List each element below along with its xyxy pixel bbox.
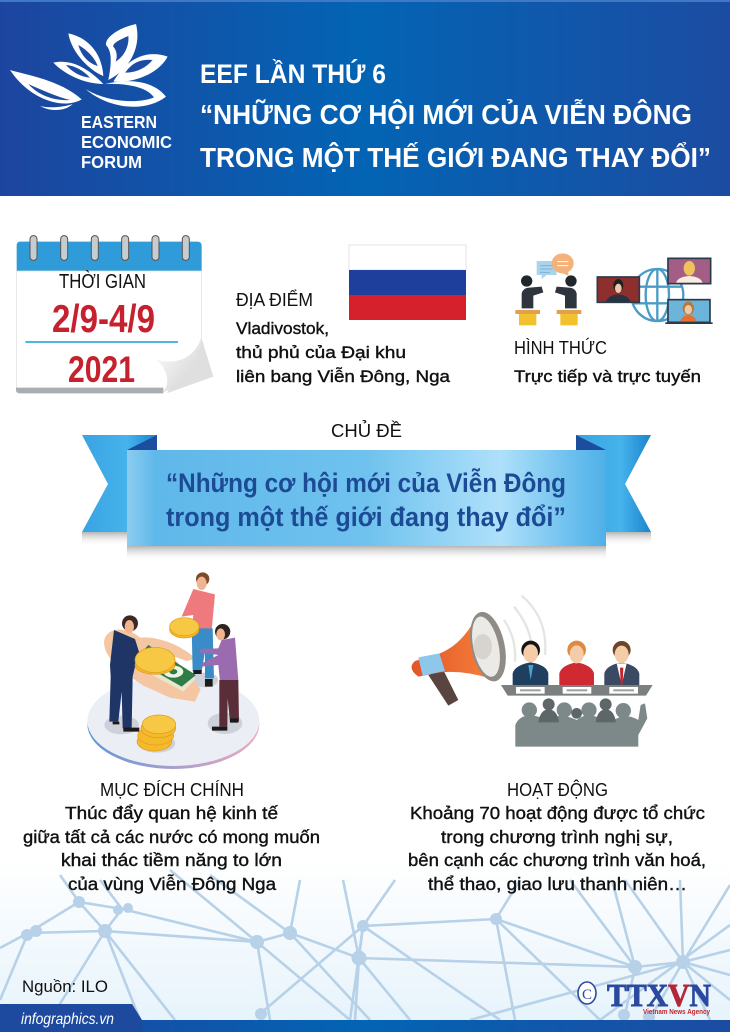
- location text: ĐỊA ĐIỂM: [236, 289, 313, 310]
- main purpose text: Thúc đẩy quan hệ kinh tế: [65, 803, 278, 823]
- open hand: [104, 629, 201, 702]
- theme heading: CHỦ ĐỀ: [331, 420, 402, 441]
- illustration: megaphone and press conference: [412, 596, 653, 747]
- disc: [87, 673, 259, 769]
- sound waves: [504, 596, 545, 662]
- title: [200, 58, 711, 173]
- activities text: trong chương trình nghị sự,: [441, 827, 673, 847]
- activities text: Khoảng 70 hoạt động được tổ chức: [410, 803, 705, 823]
- panelists: [513, 641, 639, 685]
- main purpose text: khai thác tiềm năng to lớn: [61, 850, 282, 870]
- megaphone: [412, 609, 512, 706]
- ribbon: theme: [82, 435, 651, 561]
- website: infographics.vn: [21, 1011, 114, 1028]
- location text: [236, 289, 451, 386]
- logo: Eastern Economic Forum: EASTERN: [81, 112, 157, 132]
- man in purple sweater: [200, 624, 239, 731]
- location text: liên bang Viễn Đông, Nga: [236, 367, 451, 386]
- title: EEF LẦN THỨ 6: [200, 58, 386, 89]
- header banner: [0, 0, 730, 196]
- debaters at podiums: [515, 275, 581, 325]
- logo: Eastern Economic Forum: [10, 24, 172, 172]
- man in pink sweater: [182, 572, 215, 687]
- ribbon text: [166, 468, 566, 532]
- ribbon text: “Những cơ hội mới của Viễn Đông: [166, 468, 566, 498]
- main purpose text: [23, 780, 320, 894]
- format text: HÌNH THỨC: [514, 337, 607, 358]
- banknotes: [133, 645, 196, 692]
- calendar: time: 2021: [68, 349, 135, 390]
- TTXVN logo: C: [582, 987, 592, 1003]
- source: Nguồn: ILO: [22, 977, 108, 996]
- location text: thủ phủ của Đại khu: [236, 343, 406, 362]
- footer band: [0, 1004, 730, 1032]
- main purpose text: giữa tất cả các nước có mong muốn: [23, 827, 320, 847]
- globe: [631, 269, 683, 321]
- illustration: investors, coins and money: [87, 572, 259, 769]
- format text: [514, 337, 701, 386]
- main purpose text: MỤC ĐÍCH CHÍNH: [100, 780, 244, 800]
- icon: in-person debate and online meeting: [515, 253, 713, 325]
- ribbon text: trong một thế giới đang thay đổi”: [166, 502, 566, 532]
- speech bubbles: [537, 253, 574, 279]
- title: “NHỮNG CƠ HỘI MỚI CỦA VIỄN ĐÔNG: [200, 98, 692, 130]
- gold coins: [135, 618, 199, 751]
- activities text: HOẠT ĐỘNG: [507, 779, 608, 800]
- TTXVN logo: TTXVN: [607, 977, 711, 1013]
- activities text: thể thao, giao lưu thanh niên…: [428, 874, 687, 894]
- footer network background: [0, 860, 730, 1025]
- logo: Eastern Economic Forum: ECONOMIC: [81, 132, 172, 152]
- video screens: [597, 258, 713, 324]
- location text: Vladivostok,: [236, 319, 329, 338]
- TTXVN logo: Vietnam News Agency: [643, 1007, 711, 1016]
- calendar: time: [16, 236, 213, 393]
- main purpose text: của vùng Viễn Đông Nga: [68, 873, 276, 894]
- audience: [515, 698, 647, 747]
- activities text: [408, 779, 706, 894]
- calendar: time: THỜI GIAN: [59, 270, 146, 293]
- panel table: [501, 685, 653, 696]
- activities text: bên cạnh các chương trình văn hoá,: [408, 850, 706, 870]
- format text: Trực tiếp và trực tuyến: [514, 367, 701, 386]
- icon: Russian flag: [349, 245, 466, 320]
- man in navy suit: [109, 615, 145, 732]
- calendar: time: 2/9-4/9: [52, 298, 155, 341]
- logo: Eastern Economic Forum: FORUM: [81, 152, 142, 172]
